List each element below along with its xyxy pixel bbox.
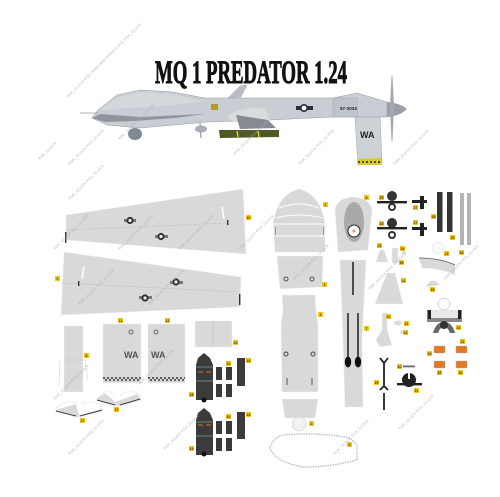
spinner: [387, 102, 407, 117]
watermark text: FOX_GLUCK FOX_GLUCK: [233, 118, 270, 156]
panel: part 2: [277, 256, 323, 289]
panel: part 24 assembly: [427, 298, 462, 333]
part number labels: 20: [227, 415, 230, 419]
part number labels: 24: [457, 326, 460, 330]
part number labels: 22: [387, 315, 390, 319]
part number labels: 27: [414, 206, 417, 210]
part number labels: 14: [402, 279, 405, 283]
panel: parts 17 left: [55, 402, 102, 417]
insignia: [155, 233, 168, 240]
part number labels: 17: [81, 419, 84, 423]
dorsal antenna fin: [228, 85, 247, 98]
part number labels: 2: [324, 283, 326, 287]
panel: part 14 trapezoid: [375, 273, 403, 304]
engine bay: [333, 98, 358, 117]
part number labels: 4: [311, 422, 313, 426]
part number labels: 19: [190, 447, 193, 451]
watermark text: FOX_GLUCK FOX_GLUCK: [118, 103, 155, 141]
panel: small dark parts 20: [216, 367, 232, 451]
part number labels: 27: [414, 221, 417, 225]
pod under fuselage: [200, 123, 201, 138]
panel: part 7: [340, 260, 366, 407]
wing root: [227, 108, 270, 121]
watermark text: FOX_GLUCK FOX_GLUCK: [178, 213, 215, 251]
panel: small parts 33 36 34: [376, 248, 406, 263]
watermark text: FOX_GLUCK FOX_GLUCK: [53, 363, 90, 401]
panel: bars 18: [237, 358, 245, 439]
panel: tail part 12: [148, 324, 185, 383]
panel: fork part 29: [380, 358, 388, 410]
part number labels: 6: [366, 196, 368, 200]
title: MQ 1 PREDATOR 1.24: [155, 55, 347, 91]
watermark text: FOX_GLUCK FOX_GLUCK: [68, 128, 105, 166]
part number labels: 32: [459, 371, 462, 375]
panel: part 30: [403, 366, 415, 367]
watermark text: FOX_GLUCK FOX_GLUCK: [148, 268, 185, 306]
fuselage: [92, 90, 387, 128]
panel: dark missile rack parts lower: [196, 408, 213, 456]
panel: parts 17 right: [97, 391, 143, 406]
watermark text: FOX_GLUCK FOX_GLUCK: [68, 163, 105, 201]
tail fin: [355, 116, 382, 165]
part number labels: 33: [378, 244, 381, 248]
watermark text: FOX_GLUCK FOX_GLUCK: [443, 243, 480, 281]
panel: part 3: [281, 295, 318, 392]
insignia: [296, 104, 313, 112]
missile rack: [219, 130, 279, 138]
part number labels: 25: [431, 288, 434, 292]
part number labels: 9: [57, 277, 59, 281]
yellow emblem: [211, 104, 218, 110]
part number labels: 3: [320, 313, 322, 317]
tail check band: [358, 158, 382, 165]
panel: part 4: [282, 399, 318, 431]
part number labels: 31: [415, 389, 418, 393]
panel: part 15 arc: [419, 242, 455, 275]
part number labels: 30: [398, 365, 401, 369]
part number labels: 18: [247, 413, 250, 417]
part number labels: 1: [325, 203, 327, 207]
underwing pylon: [236, 115, 276, 129]
insignia: [124, 217, 136, 224]
panel: part 25 half circle: [426, 280, 440, 287]
panel: wing lower part: [61, 252, 241, 315]
part number labels: 20: [227, 362, 230, 366]
watermark text: [38, 22, 480, 456]
part number labels: 7: [366, 327, 368, 331]
watermark text: FOX_GLUCK FOX_GLUCK: [118, 213, 155, 251]
serial number: 97-3034: [340, 106, 357, 111]
watermark text: FOX_GLUCK FOX_GLUCK: [138, 348, 175, 386]
tail lettering: WA: [360, 130, 375, 140]
insignia: [170, 278, 183, 286]
nose probe: [80, 112, 98, 114]
watermark text: FOX_GLUCK FOX_GLUCK: [163, 413, 200, 451]
part number labels: 32: [428, 352, 431, 356]
part number labels: 21: [405, 322, 408, 326]
part number labels: 35: [380, 222, 383, 226]
panel: part 31: [397, 373, 422, 387]
nose stripe: [92, 114, 205, 122]
tail text: WA: [151, 350, 166, 360]
part number labels: 32: [438, 371, 441, 375]
panel: nose dome part 1: [273, 189, 326, 252]
watermark text: FOX_GLUCK FOX_GLUCK: [398, 393, 435, 431]
panel: pale parts 22 21: [376, 313, 404, 347]
part number labels: 28: [432, 215, 435, 219]
drone side-view illustration: [80, 76, 407, 165]
part number labels: 5: [349, 443, 351, 447]
panel: wheel parts 35: [377, 191, 407, 239]
watermark text: FOX_GLUCK FOX_MASCARA MAKEGLUCK FOX_GLUCK: [66, 22, 143, 99]
panel: wing top part: [65, 189, 246, 254]
part number labels: 17: [115, 408, 118, 412]
part number labels: 29: [375, 381, 378, 385]
watermark text: FOX_GLUCK FOX_GLUCK: [78, 268, 115, 306]
part number labels: 16: [460, 251, 463, 255]
panel: part 8 strip: [59, 326, 88, 392]
panel: tail part 11: [103, 324, 141, 383]
insignia: [139, 294, 152, 302]
panel: orange parts 32: [434, 346, 467, 368]
watermark text: FOX_GLUCK FOX_GLUCK: [333, 418, 370, 456]
part number labels: 35: [380, 196, 383, 200]
watermark text: FOX_GLUCK FOX_GLUCK: [293, 243, 330, 281]
panel: part 13: [195, 321, 232, 347]
part number labels: 10: [247, 216, 250, 220]
watermark text: FOX_GLUCK FOX_GLUCK: [238, 213, 275, 251]
part number labels: 15: [445, 252, 448, 256]
watermark text: FOX_GLUCK: [38, 141, 58, 161]
watermark text: FOX_GLUCK FOX_GLUCK: [393, 128, 430, 166]
canopy highlight: [100, 92, 204, 110]
part number labels: 36: [400, 261, 403, 265]
part number labels: 28: [451, 236, 454, 240]
panel: T parts 27: [412, 196, 427, 236]
part number labels: 23: [404, 331, 407, 335]
sensor ball: [128, 128, 142, 140]
watermark text: FOX_GLUCK FOX_GLUCK: [53, 213, 90, 251]
watermark text: FOX_GLUCK FOX_GLUCK: [68, 418, 105, 456]
part number labels: 12: [166, 319, 169, 323]
panel: part 6 dome: [335, 197, 372, 252]
part number labels: 34: [401, 247, 404, 251]
part number labels: 13: [234, 341, 237, 345]
propeller: [390, 76, 394, 141]
part number labels: 19: [190, 393, 193, 397]
panel: dark missile rack parts upper: [196, 353, 213, 402]
part number labels: 8: [86, 354, 88, 358]
watermark text: FOX_GLUCK FOX_GLUCK: [368, 253, 405, 291]
panel: grey strips 16: [460, 193, 471, 245]
panel: bars 28: [437, 192, 452, 232]
panel: part 5 loop: [270, 434, 357, 467]
part number labels: 32: [461, 340, 464, 344]
part number labels: 18: [247, 359, 250, 363]
watermark text: FOX_GLUCK FOX_GLUCK: [298, 128, 335, 166]
part number labels: [55, 195, 465, 451]
part number labels: 11: [119, 319, 122, 323]
tail text: WA: [124, 350, 139, 360]
